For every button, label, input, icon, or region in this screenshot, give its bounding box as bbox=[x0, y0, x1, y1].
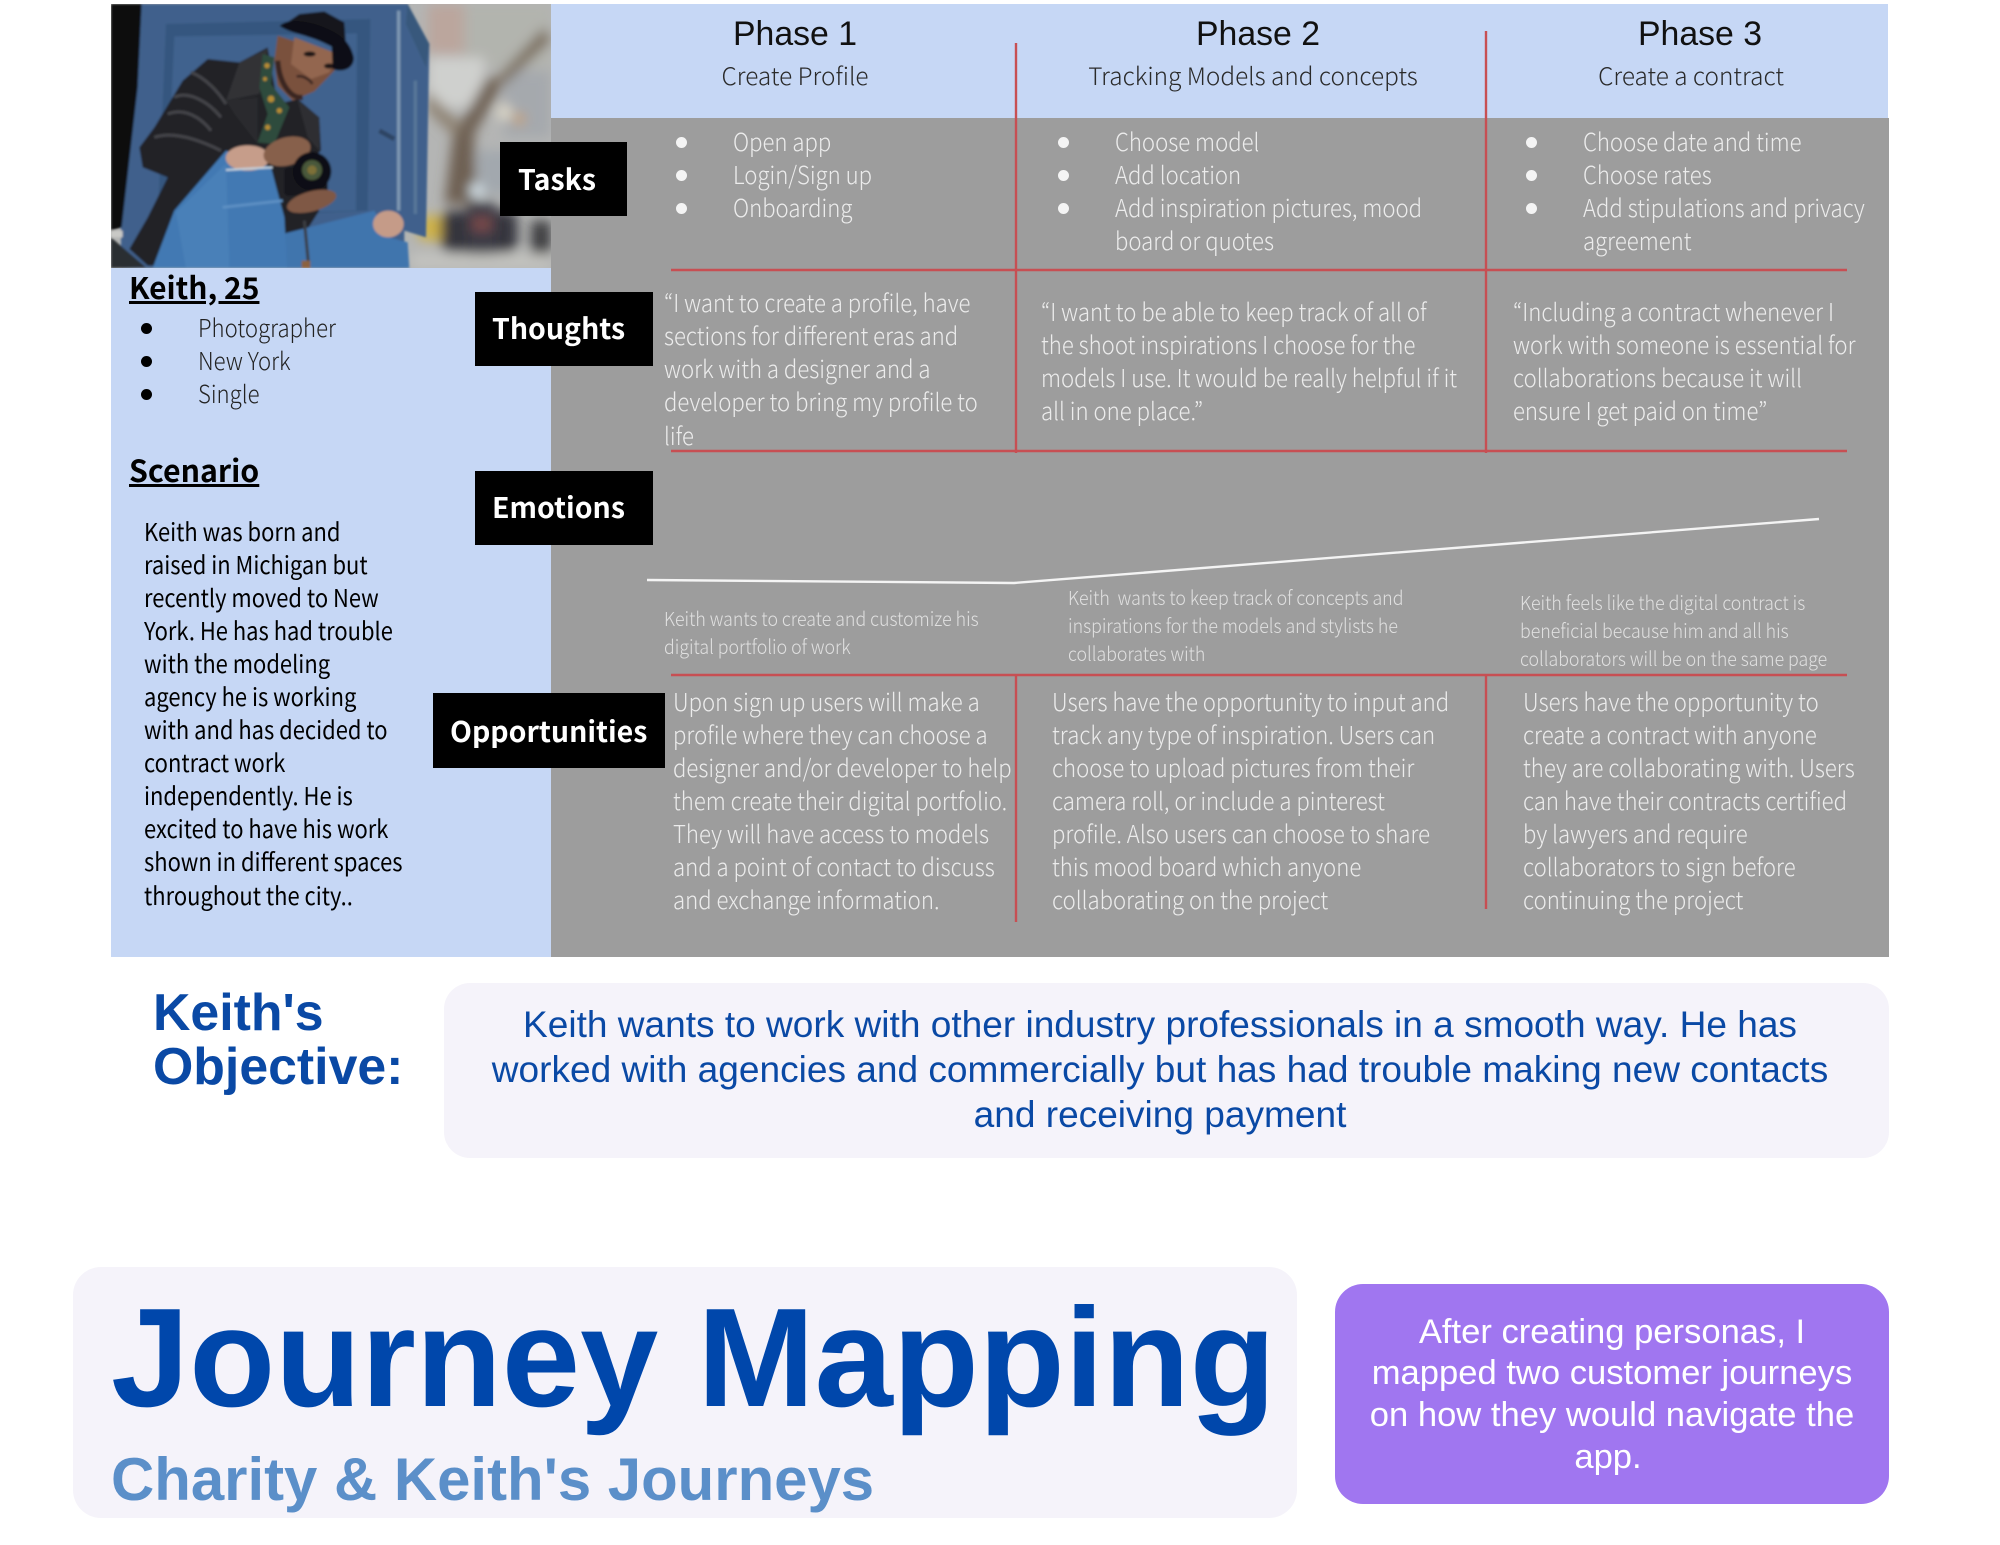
title: Journey Mapping bbox=[111, 1279, 1276, 1436]
list: phase 2 tasks: board or quotes bbox=[1115, 223, 1274, 258]
text: phase 1 opportunity: them create their digital portfolio. bbox=[673, 783, 1007, 818]
list: phase 2 tasks: Add location bbox=[1115, 157, 1241, 192]
text: intro callout: After creating personas, I bbox=[1419, 1312, 1805, 1350]
text: phase 3 opportunity: collaborators to sign before bbox=[1523, 849, 1796, 884]
text: scenario body: agency he is working bbox=[144, 679, 356, 714]
text: phase 1 opportunity: and a point of contact to discuss bbox=[673, 849, 995, 884]
jeans: back leg bbox=[283, 211, 409, 268]
text: phase 1 opportunity: Upon sign up users will make a bbox=[673, 684, 980, 718]
row label: thoughts: Thoughts bbox=[492, 307, 625, 348]
text: phase 1 emotion: Keith wants to create and customize his bbox=[664, 603, 979, 632]
text: phase 1 thought bbox=[664, 285, 978, 453]
text: phase 2 opportunity: this mood board which anyone bbox=[1052, 849, 1361, 884]
text: phase 3 thought: “Including a contract whenever I bbox=[1513, 294, 1834, 329]
text: phase 3 opportunity: Users have the opportunity to bbox=[1523, 684, 1819, 718]
text: persona name: Keith, 25 bbox=[129, 264, 259, 308]
jeans: front leg bbox=[153, 151, 287, 268]
text: intro callout bbox=[1370, 1312, 1854, 1476]
text: phase 3 emotion: collaborators will be on the same page bbox=[1520, 643, 1827, 672]
row label: thoughts bbox=[475, 292, 653, 366]
text: objective statement: and receiving payment bbox=[974, 1093, 1346, 1135]
row label: tasks bbox=[500, 142, 627, 216]
subtitle: Charity & Keith's Journeys bbox=[111, 1446, 874, 1513]
text: phase 2 emotion: Keith wants to keep track of concepts and bbox=[1068, 582, 1403, 611]
list: phase 1 tasks: Login/Sign up bbox=[733, 157, 872, 192]
list: persona facts: Photographer bbox=[198, 310, 336, 345]
heading: Keith's objective: Objective: bbox=[153, 1037, 403, 1095]
list: phase 2 tasks: Add inspiration pictures, mood bbox=[1115, 190, 1422, 225]
list: persona facts: New York bbox=[198, 343, 291, 378]
text: phase 2 thought bbox=[1041, 294, 1457, 428]
photo: Keith, photographer with camera bbox=[111, 4, 551, 268]
text: phase 3 emotion: Keith feels like the digital contract is bbox=[1520, 587, 1805, 616]
text: intro callout: mapped two customer journeys bbox=[1372, 1354, 1852, 1392]
text: intro callout: on how they would navigate the bbox=[1370, 1396, 1854, 1434]
heading: phase 2 bbox=[1088, 15, 1418, 93]
list: phase 3 tasks: Choose rates bbox=[1583, 157, 1712, 192]
text: phase 3 thought bbox=[1513, 294, 1856, 428]
heading: phase 2: Tracking Models and concepts bbox=[1088, 58, 1418, 93]
text: scenario body: recently moved to New bbox=[144, 580, 379, 615]
text: phase 1 thought: developer to bring my profile to bbox=[664, 384, 978, 419]
text: scenario body: throughout the city.. bbox=[144, 878, 353, 913]
grid lines and emotion curve bbox=[647, 31, 1847, 922]
face bbox=[274, 36, 343, 101]
text: scenario body: raised in Michigan but bbox=[144, 547, 368, 582]
text: intro callout: app. bbox=[1574, 1438, 1642, 1476]
list: phase 2 tasks: Choose model bbox=[1115, 124, 1259, 159]
heading: phase 2: Phase 2 bbox=[1196, 15, 1320, 53]
text: phase 2 thought: all in one place.” bbox=[1041, 393, 1203, 428]
text: phase 2 opportunity: collaborating on the project bbox=[1052, 882, 1328, 917]
list: phase 1 tasks: Onboarding bbox=[733, 190, 852, 225]
text: phase 2 opportunity: Users have the opportunity to input and bbox=[1052, 684, 1449, 718]
heading: Keith's objective bbox=[153, 983, 403, 1095]
panel: intro callout bbox=[1335, 1284, 1889, 1504]
list: persona facts: Single bbox=[198, 376, 260, 411]
text: phase 3 emotion: beneficial because him and all his bbox=[1520, 615, 1789, 644]
panel: phase header band bbox=[551, 4, 1888, 118]
text: phase 2 emotion: inspirations for the models and stylists he bbox=[1068, 610, 1398, 639]
text: phase 2 thought: models I use. It would be really helpful if it bbox=[1041, 360, 1457, 395]
text: scenario body bbox=[144, 514, 402, 913]
list: phase 2 tasks bbox=[1058, 124, 1422, 258]
heading: phase 1: Phase 1 bbox=[733, 15, 857, 53]
text: objective statement bbox=[492, 1002, 1828, 1135]
text: phase 1 emotion bbox=[664, 603, 979, 660]
text: phase 1 opportunity: They will have access to models bbox=[673, 816, 989, 851]
text: phase 2 thought: the shoot inspirations I choose for the bbox=[1041, 327, 1415, 362]
text: scenario body: excited to have his work bbox=[144, 811, 388, 846]
heading: phase 3: Create a contract bbox=[1598, 58, 1784, 93]
text: phase 3 thought: work with someone is essential for bbox=[1513, 327, 1856, 362]
text: phase 3 thought: collaborations because it will bbox=[1513, 360, 1802, 395]
text: scenario body: contract work bbox=[144, 745, 285, 780]
text: objective statement: worked with agencies and commercially but has had trouble making new contacts bbox=[492, 1048, 1828, 1090]
hat bbox=[281, 11, 346, 46]
text: phase 2 opportunity: profile. Also users can choose to share bbox=[1052, 816, 1430, 851]
panel: persona background bbox=[111, 4, 552, 957]
hands bbox=[260, 132, 314, 171]
text: phase 1 thought: life bbox=[664, 418, 694, 453]
text: phase 1 thought: sections for different eras and bbox=[664, 318, 958, 353]
text: phase 2 opportunity: track any type of inspiration. Users can bbox=[1052, 717, 1435, 752]
panel: journey grid background bbox=[551, 118, 1889, 957]
text: phase 2 emotion bbox=[1068, 582, 1403, 667]
heading: scenario: Scenario bbox=[129, 447, 259, 491]
panel: title card bbox=[73, 1267, 1297, 1518]
text: phase 1 thought: “I want to create a profile, have bbox=[664, 285, 970, 320]
panel: objective statement bbox=[444, 983, 1889, 1158]
list: phase 1 tasks: Open app bbox=[733, 124, 831, 159]
row label: emotions bbox=[475, 471, 653, 545]
text: phase 2 opportunity bbox=[1052, 684, 1449, 917]
row label: opportunities: Opportunities bbox=[450, 710, 647, 751]
text: phase 1 opportunity: and exchange information. bbox=[673, 882, 939, 917]
heading: phase 3 bbox=[1598, 15, 1784, 93]
text: phase 3 thought: ensure I get paid on time” bbox=[1513, 393, 1767, 428]
text: phase 1 opportunity: designer and/or developer to help bbox=[673, 750, 1012, 785]
text: phase 3 opportunity: they are collaborating with. Users bbox=[1523, 750, 1855, 785]
heading: phase 1 bbox=[721, 15, 869, 93]
text: phase 1 opportunity bbox=[673, 684, 1012, 917]
text: scenario body: shown in different spaces bbox=[144, 844, 402, 879]
text: scenario body: with the modeling bbox=[144, 646, 330, 681]
text: phase 1 opportunity: profile where they can choose a bbox=[673, 717, 988, 752]
text: phase 2 emotion: collaborates with bbox=[1068, 638, 1205, 667]
row label: opportunities bbox=[433, 693, 665, 768]
text: phase 2 opportunity: camera roll, or include a pinterest bbox=[1052, 783, 1385, 818]
scarf bbox=[258, 54, 289, 144]
jacket bbox=[129, 47, 321, 266]
text: phase 3 opportunity bbox=[1523, 684, 1855, 917]
row label: emotions: Emotions bbox=[492, 486, 625, 527]
heading: Keith's objective: Keith's bbox=[153, 983, 324, 1041]
list: phase 3 tasks: Add stipulations and privacy bbox=[1583, 190, 1865, 225]
text: phase 2 opportunity: choose to upload pictures from their bbox=[1052, 750, 1414, 785]
list: phase 3 tasks: Choose date and time bbox=[1583, 124, 1802, 159]
list: persona facts bbox=[141, 310, 336, 411]
heading: phase 1: Create Profile bbox=[721, 58, 869, 93]
text: phase 3 opportunity: continuing the project bbox=[1523, 882, 1743, 917]
list: phase 3 tasks: agreement bbox=[1583, 223, 1692, 258]
list: phase 1 tasks bbox=[676, 124, 872, 225]
heading: phase 3: Phase 3 bbox=[1638, 15, 1762, 53]
text: scenario body: Keith was born and bbox=[144, 514, 340, 549]
text: phase 1 emotion: digital portfolio of work bbox=[664, 631, 851, 660]
text: scenario body: with and has decided to bbox=[144, 712, 388, 747]
text: objective statement: Keith wants to work with other industry professionals in a smooth way. He has bbox=[523, 1002, 1797, 1044]
text: phase 1 thought: work with a designer and a bbox=[664, 351, 931, 386]
text: phase 3 opportunity: can have their contracts certified bbox=[1523, 783, 1847, 818]
text: phase 3 emotion bbox=[1520, 587, 1827, 672]
text: phase 3 opportunity: by lawyers and require bbox=[1523, 816, 1748, 851]
door bbox=[121, 4, 429, 268]
text: phase 2 thought: “I want to be able to keep track of all of bbox=[1041, 294, 1427, 329]
emotion curve bbox=[647, 519, 1819, 583]
row label: tasks: Tasks bbox=[518, 158, 596, 199]
list: phase 3 tasks bbox=[1526, 124, 1865, 258]
text: scenario body: York. He has had trouble bbox=[144, 613, 393, 648]
text: scenario body: independently. He is bbox=[144, 778, 353, 813]
text: phase 3 opportunity: create a contract with anyone bbox=[1523, 717, 1817, 752]
